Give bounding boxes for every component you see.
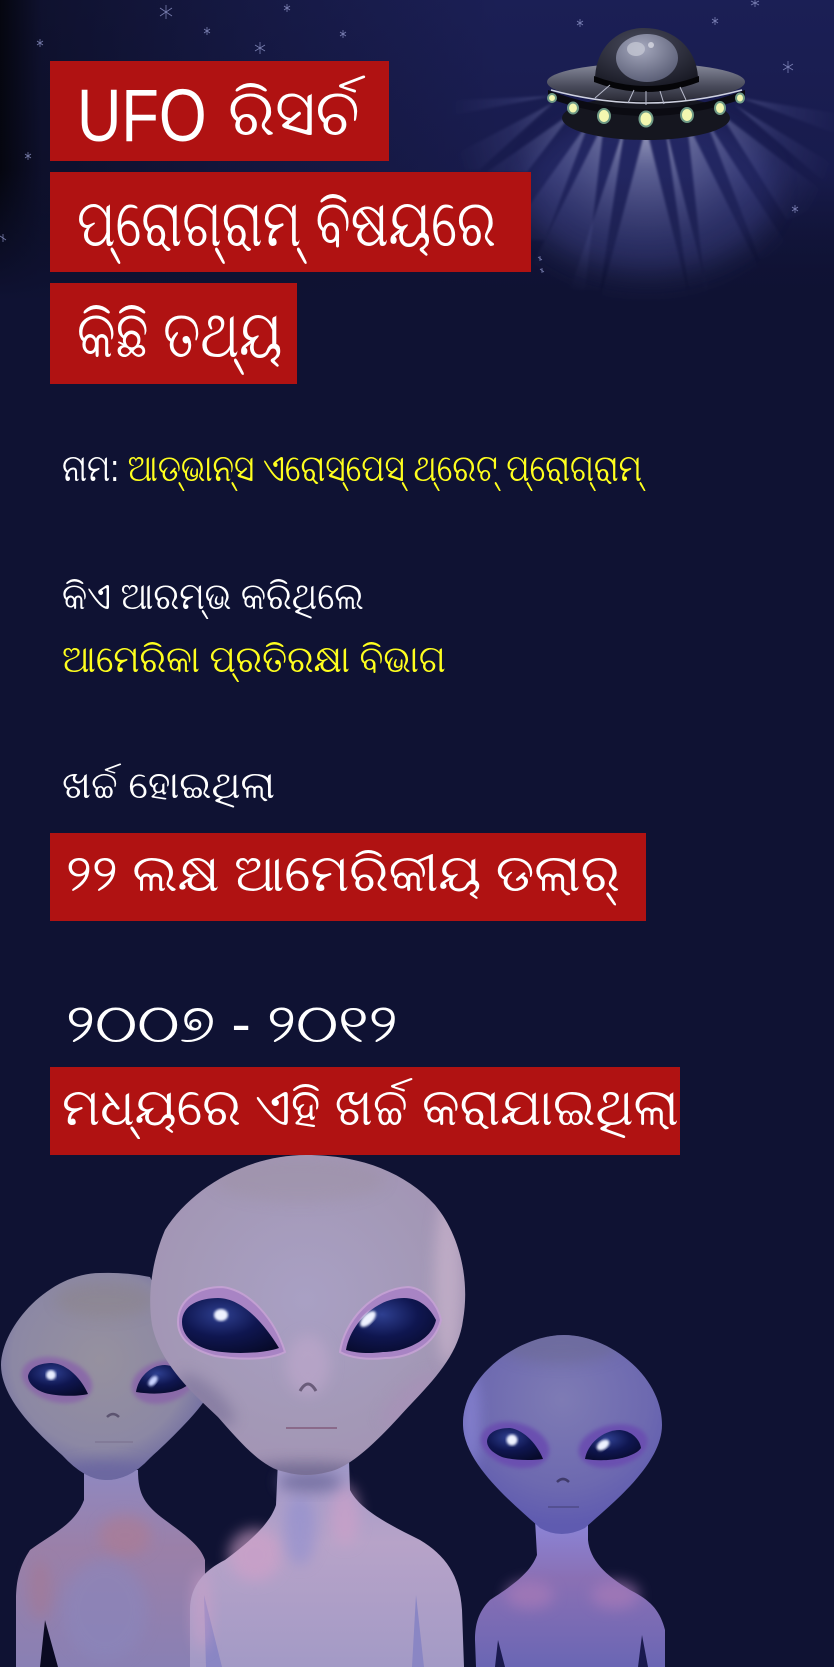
title line 1 banner <box>50 61 389 161</box>
alien: centre <box>150 1155 465 1667</box>
title line 3 banner <box>50 283 297 384</box>
years: ୨୦୦୭ - ୨୦୧୨ <box>66 994 398 1054</box>
period banner <box>50 1067 680 1155</box>
UFO light beams <box>391 96 834 300</box>
amount banner <box>50 833 646 921</box>
amount text: ୨୨ ଲକ୍ଷ ଆମେରିକୀୟ ଡଲାର୍ <box>66 845 620 903</box>
who started label: କିଏ ଆରମ୍ଭ କରିଥିଲେ <box>62 576 364 618</box>
title line 1 latin text: UFO <box>77 74 207 157</box>
name line: ନାମ: ଆଡ୍‌ଭାନ୍ସ ଏରୋସ୍ପେସ୍ ଥ୍ରେଟ୍ ପ୍ରୋଗ୍ରାମ୍ <box>62 448 642 490</box>
who started answer: ଆମେରିକା ପ୍ରତିରକ୍ଷା ବିଭାଗ <box>62 639 446 681</box>
title line 1 odia text: ରିସର୍ଚ <box>228 75 360 149</box>
stars <box>0 0 798 273</box>
title line 2 text: ପ୍ରୋଗ୍ରାମ୍ ବିଷୟରେ <box>77 186 496 260</box>
night sky <box>0 0 834 300</box>
UFO <box>547 28 745 140</box>
alien: left <box>1 1273 205 1667</box>
period text: ମଧ୍ୟରେ ଏହି ଖର୍ଚ୍ଚ କରାଯାଇଥିଲା <box>62 1079 679 1137</box>
alien: right <box>460 1327 665 1667</box>
title line 2 banner <box>50 172 531 272</box>
title line 3 text: କିଛି ତଥ୍ୟ <box>77 297 282 371</box>
spending label: ଖର୍ଚ୍ଚ ହୋଇଥିଲା <box>62 765 275 807</box>
